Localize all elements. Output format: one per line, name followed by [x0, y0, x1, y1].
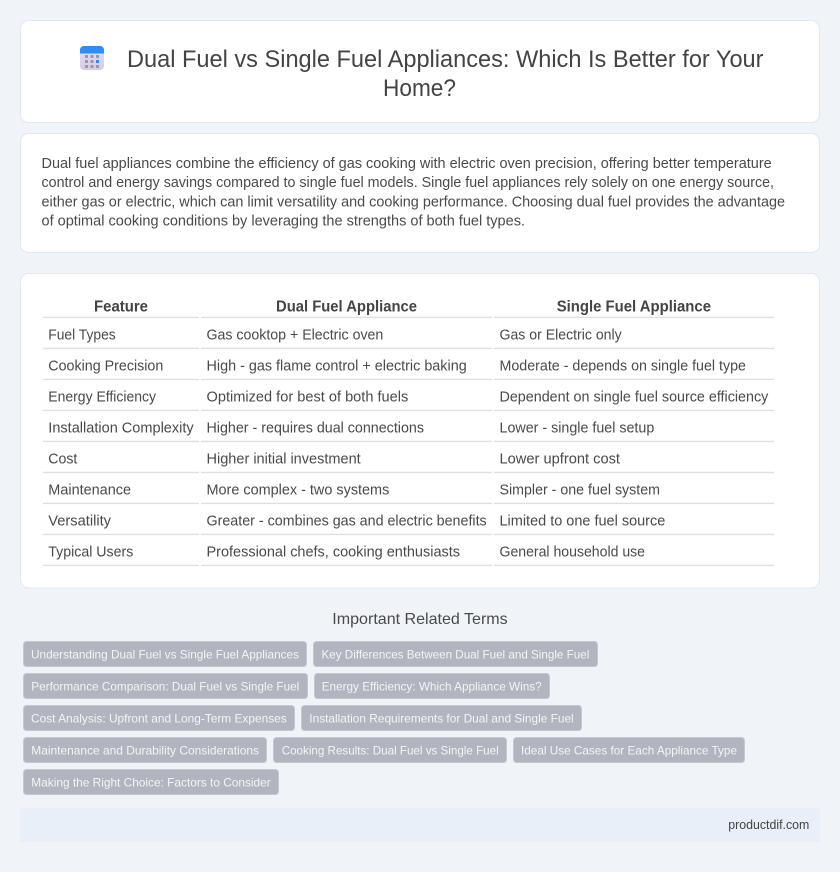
- tag: Ideal Use Cases for Each Appliance Type: [521, 743, 737, 757]
- tag: Performance Comparison: Dual Fuel vs Single Fuel: [31, 679, 299, 693]
- table header row: [94, 299, 711, 316]
- tag: [24, 706, 294, 730]
- row: fuel types: Fuel Types: [48, 327, 116, 343]
- row: typical users: Professional chefs, cooking enthusiasts: [206, 544, 460, 560]
- tag: [274, 738, 506, 762]
- row: maintenance: [48, 482, 660, 498]
- row: typical users: Typical Users: [48, 544, 133, 560]
- tag: Cost Analysis: Upfront and Long-Term Expenses: [31, 711, 287, 725]
- tag: Key Differences Between Dual Fuel and Single Fuel: [322, 647, 589, 661]
- tag: [514, 738, 744, 762]
- footer: [20, 808, 820, 842]
- panel: summary paragraph: [20, 134, 820, 252]
- icon: calendar: [80, 46, 104, 70]
- text block: summary: either gas or electric, which can limit versatility and cooking performance. Choosing dual fuel provides the advantage: [42, 194, 785, 210]
- row: cost: [48, 451, 620, 467]
- row: installation complexity: Lower - single fuel setup: [500, 420, 654, 436]
- tag: [314, 674, 550, 698]
- row: cost: Higher initial investment: [206, 451, 361, 467]
- row: installation complexity: Higher - requires dual connections: [206, 420, 424, 436]
- tag: Cooking Results: Dual Fuel vs Single Fuel: [282, 743, 499, 757]
- row: installation complexity: Installation Complexity: [48, 420, 194, 436]
- heading: important related terms: Important Related Terms: [332, 611, 508, 628]
- row: cooking precision: Moderate - depends on single fuel type: [500, 358, 746, 374]
- tag: [24, 738, 266, 762]
- row: cooking precision: Cooking Precision: [48, 358, 163, 374]
- title: Home?: [383, 75, 456, 102]
- row: energy efficiency: Optimized for best of both fuels: [206, 389, 408, 405]
- title: [127, 46, 764, 102]
- text block: summary: of optimal cooking conditions by leveraging the strengths of both fuel types.: [42, 214, 525, 230]
- row: energy efficiency: Energy Efficiency: [48, 389, 157, 405]
- tag: Understanding Dual Fuel vs Single Fuel Appliances: [31, 647, 299, 661]
- tag: Maintenance and Durability Considerations: [31, 743, 259, 757]
- row: fuel types: [48, 327, 622, 343]
- row: energy efficiency: Dependent on single fuel source efficiency: [500, 389, 769, 405]
- row: cooking precision: [48, 358, 746, 374]
- text block: summary: control and energy savings compared to single fuel models. Single fuel appliances rely solely on one energy source,: [42, 175, 774, 191]
- table header row: Feature: [94, 299, 148, 316]
- row: typical users: General household use: [500, 544, 645, 560]
- text block: summary: [42, 156, 785, 230]
- tag: Making the Right Choice: Factors to Consider: [31, 775, 271, 789]
- row: typical users: [48, 544, 645, 560]
- tag: [314, 642, 598, 666]
- table header row: Dual Fuel Appliance: [276, 299, 417, 316]
- tag: Installation Requirements for Dual and Single Fuel: [309, 711, 574, 725]
- row: cost: Lower upfront cost: [500, 451, 620, 467]
- row: fuel types: Gas cooktop + Electric oven: [206, 327, 383, 343]
- title: Dual Fuel vs Single Fuel Appliances: Which Is Better for Your: [127, 46, 764, 73]
- table header row: Single Fuel Appliance: [557, 299, 711, 316]
- text block: summary: Dual fuel appliances combine the efficiency of gas cooking with electric oven precision, offering better temperature: [42, 156, 772, 172]
- panel: title header: [20, 20, 820, 122]
- tag: Energy Efficiency: Which Appliance Wins?: [322, 679, 542, 693]
- row: maintenance: Maintenance: [48, 482, 131, 498]
- panel: comparison table: [20, 274, 820, 588]
- row: cooking precision: High - gas flame control + electric baking: [206, 358, 467, 374]
- row: versatility: Greater - combines gas and electric benefits: [206, 513, 487, 529]
- row: energy efficiency: [48, 389, 769, 405]
- row: installation complexity: [48, 420, 654, 436]
- tag: [24, 674, 308, 698]
- row: versatility: [48, 513, 665, 529]
- footer source text: productdif.com: [728, 818, 809, 832]
- tag: [302, 706, 582, 730]
- row: versatility: Versatility: [48, 513, 112, 529]
- row: maintenance: More complex - two systems: [206, 482, 389, 498]
- tag list: related terms: [24, 642, 744, 794]
- row: versatility: Limited to one fuel source: [500, 513, 665, 529]
- tag: [24, 642, 306, 666]
- row: cost: Cost: [48, 451, 77, 467]
- row: fuel types: Gas or Electric only: [500, 327, 622, 343]
- tag: [24, 770, 278, 794]
- row: maintenance: Simpler - one fuel system: [500, 482, 660, 498]
